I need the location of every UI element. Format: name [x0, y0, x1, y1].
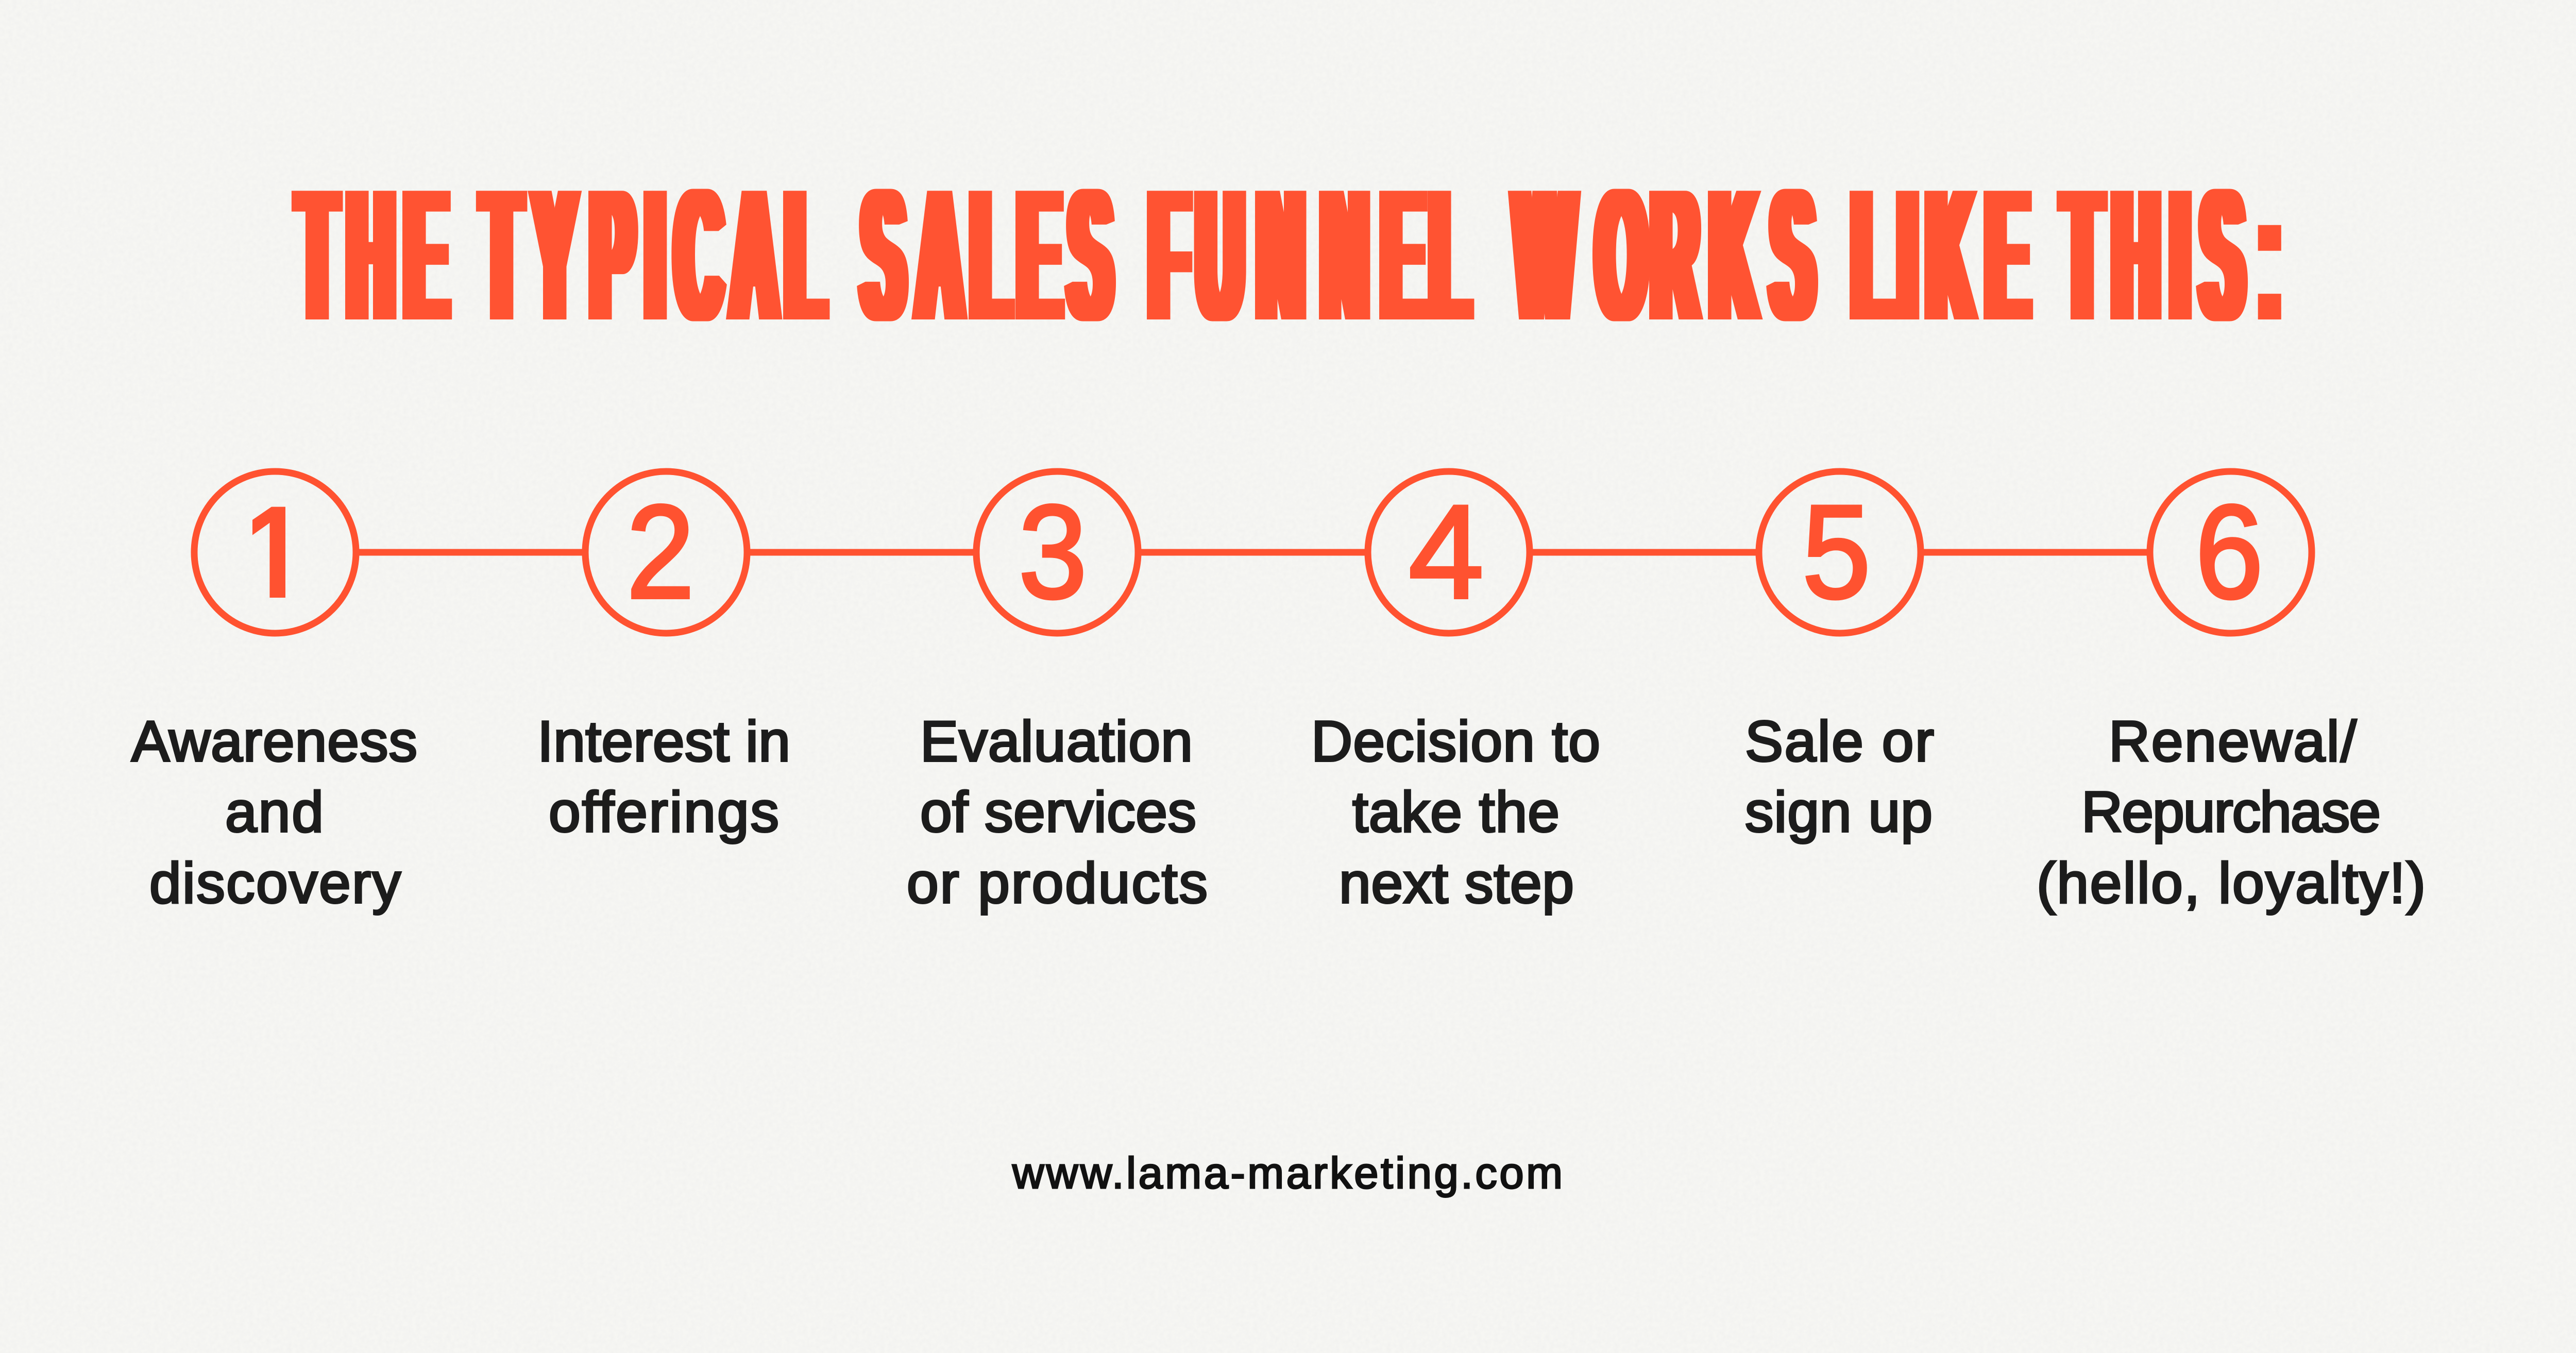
label: interest in offerings: [537, 709, 790, 844]
infographic canvas: [130, 189, 2424, 1198]
label: awareness and discovery: Awareness: [131, 709, 417, 773]
step 6: [2037, 471, 2426, 915]
number badge 4: [1368, 471, 1530, 633]
connector line: 3 to 4: [1138, 549, 1368, 555]
number badge 1: 1: [232, 474, 318, 647]
label: awareness and discovery: [131, 709, 417, 915]
title: THE TYPICAL SALES FUNNEL WORKS LIKE THIS:: [298, 151, 2280, 360]
number badge 3: [976, 471, 1138, 633]
label: interest in offerings: Interest in: [537, 709, 790, 773]
step 5: [1745, 471, 1934, 844]
step 4: [1311, 471, 1600, 915]
step 1: [131, 471, 417, 915]
number badge 6: 6: [2195, 477, 2263, 626]
label: awareness and discovery: discovery: [149, 851, 401, 915]
connector line: 2 to 3: [747, 549, 976, 555]
label: evaluation of services or products: or products: [907, 851, 1208, 915]
label: interest in offerings: offerings: [549, 780, 779, 844]
label: decision to take the next step: take the: [1352, 780, 1560, 844]
number badge 3: 3: [1019, 477, 1087, 626]
step 3: [907, 471, 1208, 915]
label: decision to take the next step: next step: [1339, 851, 1574, 915]
label: sale or sign up: sign up: [1745, 780, 1933, 844]
label: sale or sign up: [1745, 709, 1934, 844]
label: renewal repurchase loyalty: (hello, loyalty!): [2037, 851, 2426, 915]
label: evaluation of services or products: Evaluation: [920, 709, 1193, 773]
label: renewal repurchase loyalty: [2037, 709, 2426, 915]
number badge 5: 5: [1802, 477, 1871, 626]
label: decision to take the next step: [1311, 709, 1600, 915]
number badge 2: 2: [626, 477, 694, 626]
step 2: [537, 471, 790, 844]
connector line: 5 to 6: [1920, 549, 2150, 555]
website url: www.lama-marketing.com: [1012, 1149, 1563, 1198]
connector line: 4 to 5: [1529, 549, 1759, 555]
number badge 2: [585, 471, 747, 633]
label: decision to take the next step: Decision to: [1311, 709, 1600, 773]
label: awareness and discovery: and: [225, 780, 324, 844]
label: evaluation of services or products: of services: [920, 780, 1196, 844]
label: renewal repurchase loyalty: Renewal/: [2109, 709, 2357, 773]
label: renewal repurchase loyalty: Repurchase: [2081, 780, 2381, 844]
number badge 6: [2150, 471, 2312, 633]
label: evaluation of services or products: [907, 709, 1208, 915]
connector line: 1 to 2: [355, 549, 585, 555]
label: sale or sign up: Sale or: [1745, 709, 1934, 773]
number badge 5: [1759, 471, 1921, 633]
number badge 4: 4: [1409, 477, 1484, 626]
number badge 1: [194, 471, 356, 647]
